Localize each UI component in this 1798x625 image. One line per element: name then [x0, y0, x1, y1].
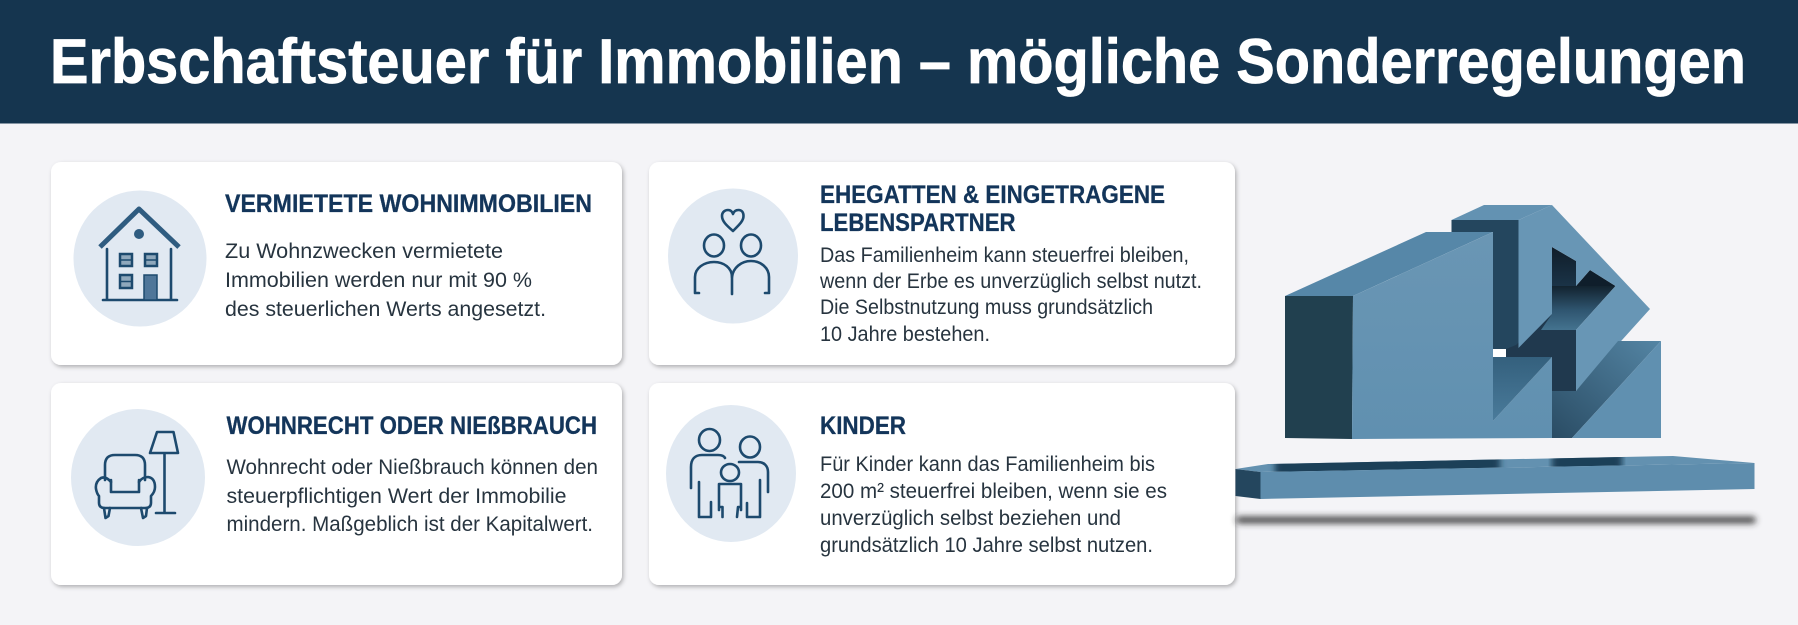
icon: family	[666, 405, 796, 542]
body text: Immobilien werden nur mit 90 %	[225, 268, 532, 292]
house body	[1285, 205, 1661, 439]
body text	[819, 243, 1202, 346]
icon: armchair and lamp	[71, 409, 205, 546]
heading: KINDER	[820, 412, 906, 440]
body text: Die Selbstnutzung muss grundsätzlich	[820, 295, 1153, 319]
body text: steuerpflichtigen Wert der Immobilie	[226, 484, 566, 508]
panel: vermietete Wohnimmobilien	[51, 162, 622, 365]
body text	[226, 455, 598, 536]
panel: Kinder	[649, 383, 1235, 585]
body text: Wohnrecht oder Nießbrauch können den	[226, 455, 598, 479]
heading: VERMIETETE WOHNIMMOBILIEN	[225, 190, 592, 218]
ground shadow	[1236, 516, 1756, 524]
body text: mindern. Maßgeblich ist der Kapitalwert.	[226, 512, 593, 536]
body text: unverzüglich selbst beziehen und	[820, 506, 1121, 530]
slab	[1236, 456, 1754, 499]
body text: Für Kinder kann das Familienheim bis	[820, 452, 1155, 476]
body text: grundsätzlich 10 Jahre selbst nutzen.	[820, 533, 1153, 557]
icon: couple with heart	[668, 188, 798, 324]
body text: Das Familienheim kann steuerfrei bleiben,	[820, 243, 1189, 267]
body text	[225, 239, 546, 321]
header band	[0, 0, 1798, 124]
heading: WOHNRECHT ODER NIEßBRAUCH	[226, 412, 597, 440]
body text: wenn der Erbe es unverzüglich selbst nutzt.	[819, 269, 1202, 293]
body text: Zu Wohnzwecken vermietete	[225, 239, 503, 263]
body text: des steuerlichen Werts angesetzt.	[225, 297, 546, 321]
heading: LEBENSPARTNER	[820, 209, 1016, 237]
body text	[820, 452, 1167, 557]
icon: house	[74, 190, 206, 326]
heading: EHEGATTEN & EINGETRAGENE	[820, 181, 1165, 209]
body text: 10 Jahre bestehen.	[820, 322, 990, 346]
body text: 200 m² steuerfrei bleiben, wenn sie es	[820, 479, 1167, 503]
panel: Wohnrecht oder Nießbrauch	[51, 383, 622, 585]
panel: Ehegatten und eingetragene Lebenspartner	[649, 162, 1235, 365]
heading	[820, 181, 1165, 237]
illustration: abstract 3D house on a slab	[1236, 205, 1756, 524]
